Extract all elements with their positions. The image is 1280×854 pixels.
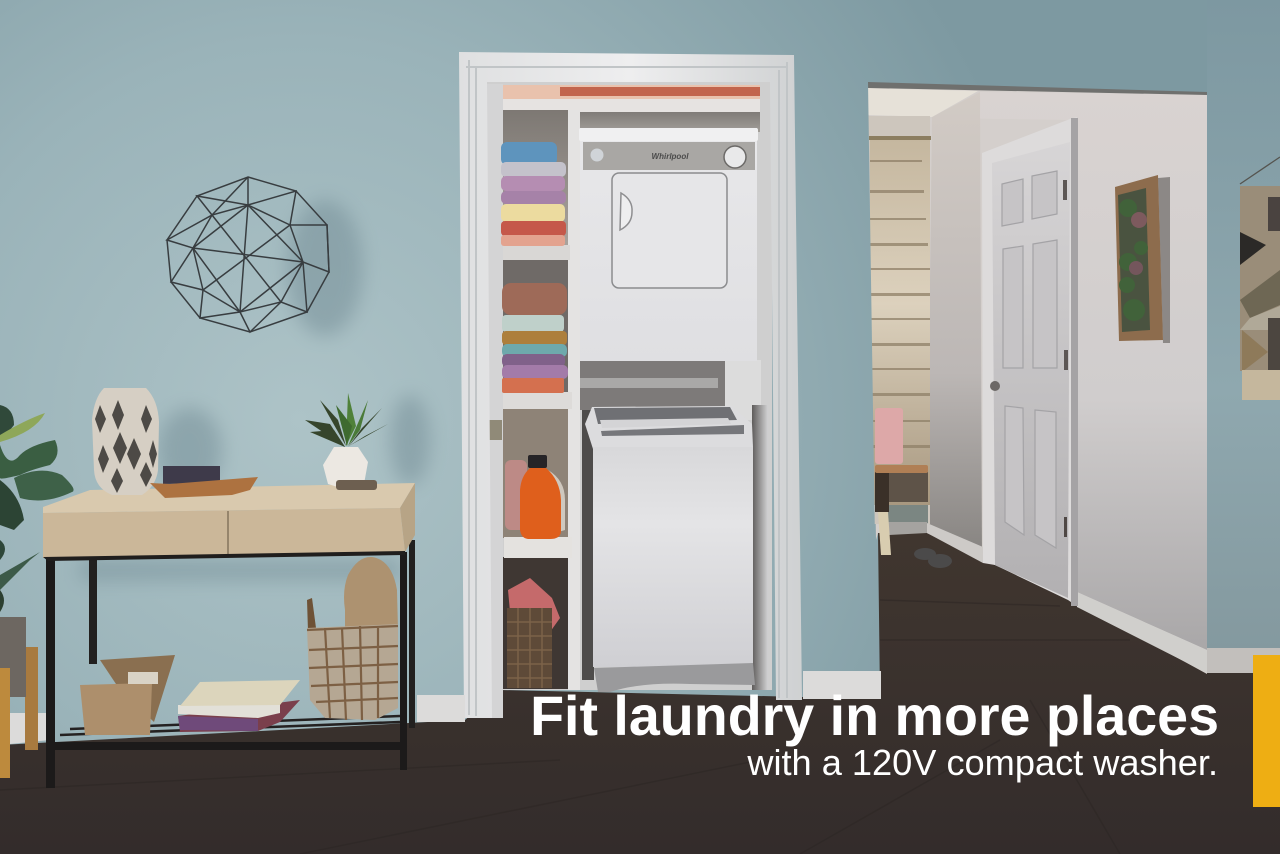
framed succulent — [1115, 175, 1170, 343]
wooden crate — [80, 655, 175, 735]
closet interior — [487, 82, 772, 718]
shoes — [914, 548, 952, 568]
far wall — [1207, 0, 1280, 650]
accent bar — [1253, 655, 1280, 807]
hall door — [982, 117, 1078, 607]
stack of books — [178, 680, 300, 732]
baseboards — [10, 671, 881, 744]
headline: Fit laundry in more places — [530, 685, 1219, 747]
console table — [43, 483, 415, 788]
wall shadows — [80, 200, 430, 580]
dryer control panel — [583, 142, 755, 170]
plush toy — [344, 557, 398, 630]
dryer — [579, 128, 758, 361]
wicker basket — [307, 598, 398, 720]
potted floor plant at left — [0, 405, 74, 778]
hall bench with pink bag — [875, 408, 928, 555]
folded towels upper — [501, 142, 566, 246]
hallway opening — [868, 82, 1207, 674]
potted plant — [305, 393, 388, 490]
woven wall hanging — [1240, 157, 1280, 400]
dryer control panel: Whirlpool — [652, 152, 689, 161]
curtain — [869, 136, 931, 505]
vase — [92, 388, 159, 495]
closet basket — [507, 578, 560, 688]
tray with book — [150, 466, 258, 498]
floor — [0, 533, 1280, 854]
far wall baseboard — [1207, 648, 1280, 673]
dryer handle — [620, 193, 632, 230]
washer — [585, 406, 755, 692]
wall art: geometric sphere — [167, 177, 329, 332]
baseboard by hall — [803, 671, 881, 699]
door frame trim — [459, 52, 802, 718]
wall return left of hall — [868, 82, 877, 672]
detergent bottles — [505, 455, 565, 539]
subheading: with a 120V compact washer. — [747, 742, 1218, 783]
folded towels lower — [502, 283, 568, 393]
dryer door — [612, 173, 727, 288]
